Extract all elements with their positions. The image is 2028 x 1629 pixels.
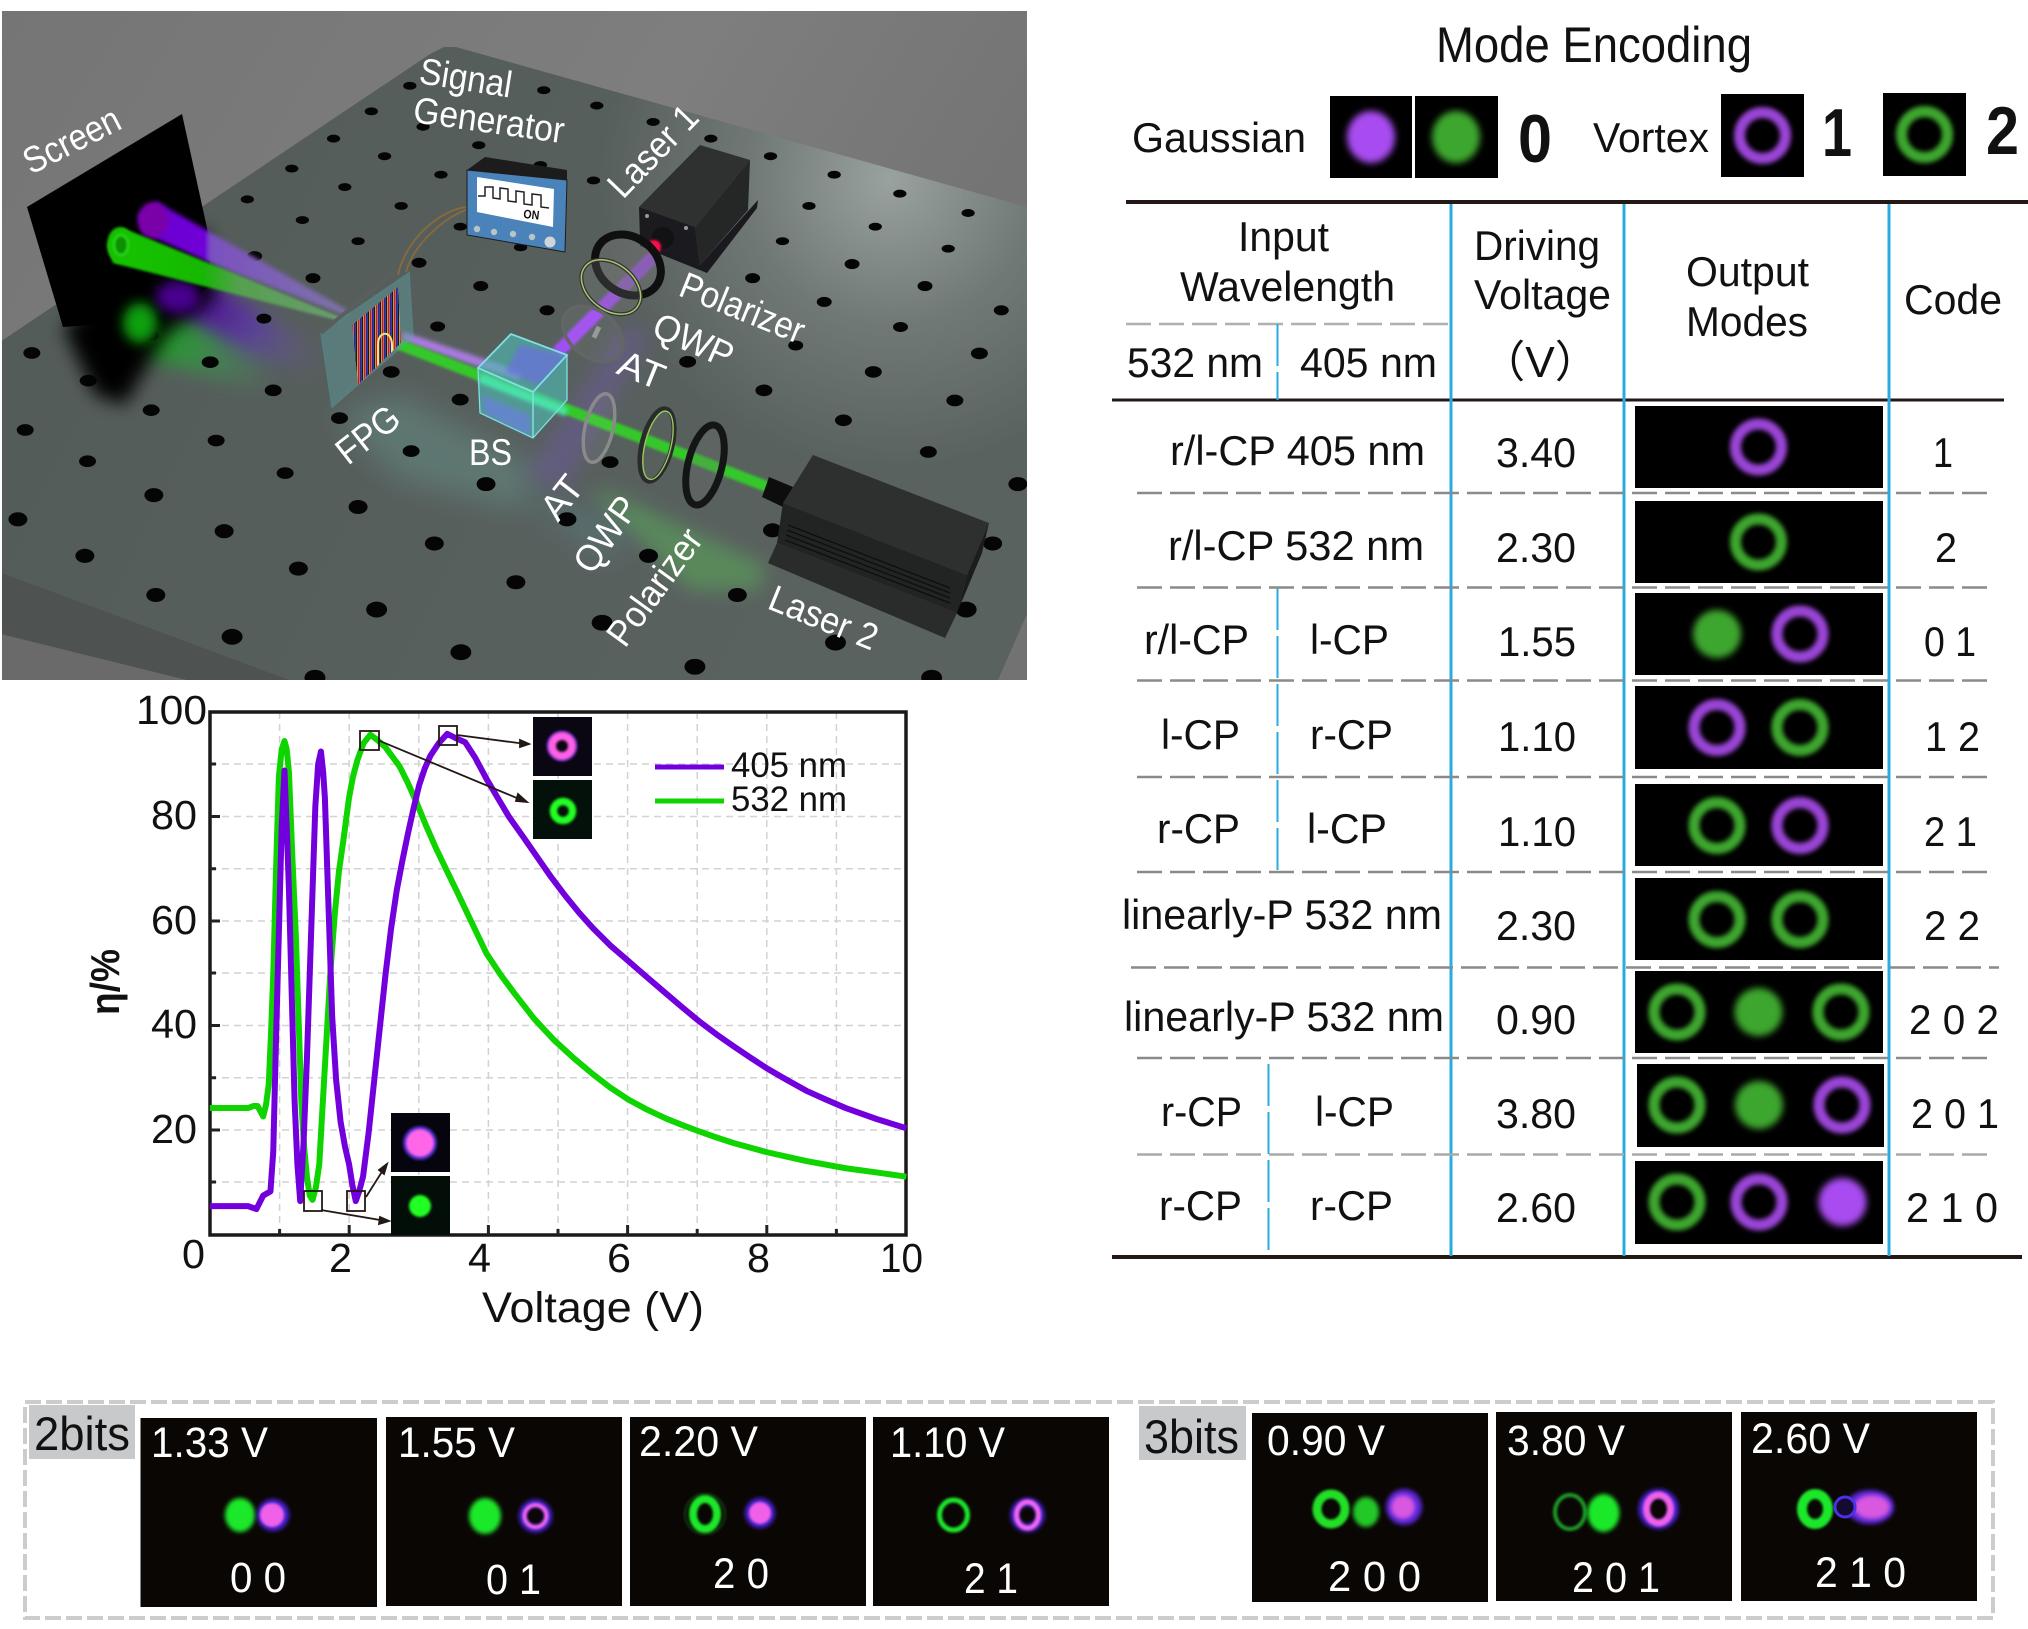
y axis labels: 80 — [151, 792, 197, 838]
result: 1.33 V, 0 0: 1.33 V — [151, 1419, 268, 1467]
result: 3.80 V, 2 0 1 — [1496, 1412, 1732, 1602]
table — [1112, 202, 2028, 1257]
result: 3.80 V, 2 0 1: 2 0 1 — [1572, 1554, 1660, 1602]
table light reflections — [125, 275, 765, 590]
grid lines — [210, 712, 906, 1234]
icon: laser 1 — [639, 145, 758, 273]
result: 2.20 V, 2 0: 2 0 — [713, 1550, 769, 1598]
result: 1.55 V, 0 1: 1.55 V — [398, 1419, 515, 1467]
icon: lower attenuator — [582, 392, 616, 464]
panel: mode encoding legend — [1132, 17, 2019, 178]
swatch: green gaussian — [1415, 96, 1498, 178]
result: 1.10 V, 2 1 — [873, 1417, 1109, 1606]
result: 1.10 V, 2 1: 2 1 — [964, 1555, 1018, 1603]
row: r-CP, l-CP, 3.80 V: 2 0 1 — [1911, 1090, 1999, 1137]
table header: Modes — [1686, 298, 1808, 345]
table header: Output — [1686, 248, 1809, 295]
swatch: purple vortex — [1721, 94, 1804, 177]
x axis labels: 6 — [607, 1235, 631, 1281]
result: 2.20 V, 2 0 — [630, 1417, 866, 1606]
y axis labels: 40 — [151, 1001, 197, 1047]
table header — [1126, 213, 2002, 387]
row: linearly-P 532 nm, 2.30 V: linearly-P 532 nm — [1122, 891, 1442, 938]
y axis labels: 100 — [136, 687, 207, 733]
tick marks — [210, 764, 836, 1235]
row: r/l-CP 532 nm: 2.30 — [1496, 524, 1576, 571]
axes frame — [210, 712, 906, 1235]
result: 1.55 V, 0 1 — [386, 1417, 622, 1606]
row: linearly-P 532 nm, 2.30 V: 2.30 — [1496, 902, 1576, 949]
badge: 3bits: 3bits — [1144, 1410, 1239, 1463]
panel: optical setup render — [0, 11, 1027, 686]
code 2: 2 — [1986, 93, 2019, 169]
row: r/l-CP, l-CP: 0 1 — [1924, 618, 1976, 665]
icon: FPG device — [321, 273, 413, 407]
result: 0.90 V, 2 0 0: 0.90 V — [1267, 1417, 1385, 1465]
main laser beams — [398, 253, 768, 487]
icon: upper polarizer — [591, 230, 665, 300]
code 1: 1 — [1822, 95, 1852, 171]
icon: upper attenuator — [561, 304, 625, 364]
x axis labels: 8 — [747, 1235, 770, 1281]
label: Laser 1: Laser 1 — [599, 97, 707, 206]
row: r/l-CP 532 nm — [1168, 501, 1957, 583]
row: r/l-CP, l-CP: r/l-CP — [1144, 616, 1249, 663]
screen reflections — [123, 281, 200, 343]
table rules — [1112, 202, 2028, 1257]
icon: lower polarizer — [682, 422, 728, 508]
icon: lower QWP — [637, 406, 677, 484]
title: Mode Encoding — [1436, 17, 1752, 73]
label: QWP upper: QWP — [647, 305, 740, 376]
row: r-CP, r-CP, 2.60 V: 2.60 — [1496, 1184, 1576, 1231]
row: r-CP, r-CP, 2.60 V — [1159, 1161, 1998, 1244]
swatch: green vortex — [1883, 93, 1966, 176]
table header: 532 nm — [1127, 339, 1263, 386]
swatch: purple gaussian — [1330, 96, 1412, 178]
row: r/l-CP 532 nm: r/l-CP 532 nm — [1168, 522, 1424, 569]
optical table — [0, 47, 1027, 680]
row: r-CP, l-CP: 1.10 — [1498, 808, 1576, 855]
table header: 405 nm — [1300, 339, 1437, 386]
y axis labels: 60 — [151, 897, 197, 943]
table header: Input — [1238, 213, 1329, 260]
table header: （V） — [1481, 338, 1599, 387]
row: linearly-P 532 nm, 0.90 V: 0.90 — [1496, 996, 1576, 1043]
row: r-CP, l-CP: 2 1 — [1924, 808, 1977, 855]
row: r-CP, l-CP — [1157, 784, 1977, 866]
row: linearly-P 532 nm, 2.30 V: 2 2 — [1924, 902, 1980, 949]
curve: 405 nm — [210, 734, 906, 1209]
result: 2.20 V, 2 0: 2.20 V — [639, 1418, 758, 1466]
icon: beam splitter cube — [478, 334, 567, 438]
icon: signal generator: ON — [523, 207, 540, 223]
row: r/l-CP 405 nm: 1 — [1933, 429, 1953, 476]
row: r-CP, r-CP, 2.60 V: r-CP — [1310, 1182, 1393, 1229]
row: r/l-CP 405 nm: r/l-CP 405 nm — [1170, 427, 1425, 474]
row: l-CP, r-CP: l-CP — [1161, 711, 1240, 758]
row: linearly-P 532 nm, 2.30 V — [1122, 878, 1980, 960]
result: 3.80 V, 2 0 1: 3.80 V — [1507, 1417, 1625, 1465]
x axis title: Voltage (V) — [482, 1284, 704, 1332]
dashed frame — [25, 1402, 1993, 1618]
result: 2.60 V, 2 1 0 — [1741, 1412, 1977, 1601]
row: r/l-CP, l-CP: l-CP — [1310, 616, 1389, 663]
row: r-CP, l-CP, 3.80 V — [1161, 1064, 1999, 1147]
chart: efficiency vs voltage — [82, 687, 923, 1332]
result: 2.60 V, 2 1 0: 2 1 0 — [1815, 1549, 1906, 1597]
row: r/l-CP 405 nm: 3.40 — [1496, 429, 1576, 476]
label: Polarizer upper: Polarizer — [674, 264, 811, 351]
inset: gaussian 405 nm — [391, 1113, 450, 1172]
x axis labels — [182, 1231, 923, 1281]
result: 1.33 V, 0 0 — [140, 1418, 377, 1607]
label: BS: BS — [469, 432, 512, 473]
y axis labels: 20 — [151, 1106, 197, 1152]
row: r/l-CP, l-CP — [1144, 593, 1976, 675]
icon: laser 2 — [762, 455, 989, 638]
label: Generator: Generator — [411, 89, 567, 151]
x axis labels: 4 — [468, 1235, 491, 1281]
table header: Wavelength — [1180, 263, 1395, 310]
label: AT upper: AT — [612, 342, 671, 398]
icon: upper QWP — [579, 258, 643, 316]
y axis labels — [136, 687, 207, 1152]
code 0: 0 — [1518, 101, 1552, 177]
legend: 405 nm — [731, 746, 847, 785]
row: r-CP, l-CP: l-CP — [1307, 805, 1387, 852]
row: r/l-CP 532 nm: 2 — [1935, 524, 1957, 571]
label: QWP lower: QWP — [565, 488, 647, 581]
row: r-CP, l-CP, 3.80 V: 3.80 — [1496, 1090, 1576, 1137]
y axis title: η/% — [82, 949, 128, 1015]
row: l-CP, r-CP — [1161, 686, 1980, 769]
row: r/l-CP 405 nm — [1170, 406, 1953, 488]
row: r/l-CP, l-CP: 1.55 — [1498, 618, 1576, 665]
label: Signal: Signal — [417, 50, 515, 105]
x axis labels: 2 — [329, 1235, 352, 1281]
panel: experimental results — [25, 1402, 1993, 1618]
result: 1.55 V, 0 1: 0 1 — [486, 1556, 541, 1604]
label: Laser 2: Laser 2 — [763, 577, 884, 658]
selection boxes and arrows — [304, 726, 529, 1224]
result: 2.60 V, 2 1 0: 2.60 V — [1751, 1415, 1870, 1463]
result: 1.10 V, 2 1: 1.10 V — [890, 1419, 1005, 1467]
x axis labels: 10 — [880, 1235, 923, 1281]
row: l-CP, r-CP: 1.10 — [1498, 713, 1576, 760]
label: Polarizer lower: Polarizer — [598, 520, 711, 654]
row: linearly-P 532 nm, 0.90 V: linearly-P 532 nm — [1124, 993, 1444, 1040]
badge: 2bits: 2bits — [34, 1407, 130, 1460]
row: r-CP, l-CP, 3.80 V: l-CP — [1315, 1088, 1394, 1135]
row: l-CP, r-CP: r-CP — [1310, 711, 1393, 758]
row: l-CP, r-CP: 1 2 — [1925, 713, 1980, 760]
legend — [655, 746, 847, 819]
result: 1.33 V, 0 0: 0 0 — [230, 1554, 286, 1602]
icon: screen — [27, 114, 212, 327]
row: r-CP, r-CP, 2.60 V: 2 1 0 — [1906, 1184, 1998, 1231]
table header: Driving — [1474, 222, 1600, 269]
row: linearly-P 532 nm, 0.90 V: 2 0 2 — [1909, 996, 1999, 1043]
screen shadow — [63, 228, 215, 405]
inset: vortex 405 nm — [533, 717, 592, 776]
label: Gaussian: Gaussian — [1132, 114, 1306, 161]
row: linearly-P 532 nm, 0.90 V — [1124, 971, 1999, 1053]
row dividers — [1131, 493, 1999, 1154]
laser beams to screen — [107, 202, 347, 321]
inset: gaussian 532 nm — [391, 1176, 450, 1235]
row: r-CP, l-CP: r-CP — [1157, 805, 1240, 852]
table header: Code — [1904, 276, 2002, 323]
label: FPG: FPG — [328, 397, 408, 472]
table mounting holes — [8, 82, 1027, 686]
label: AT lower: AT — [532, 467, 592, 528]
table header: Voltage — [1474, 271, 1611, 318]
x axis labels: 0 — [182, 1231, 205, 1277]
label: Vortex: Vortex — [1593, 114, 1709, 161]
wires — [398, 207, 466, 275]
setup labels — [16, 50, 884, 658]
result: 0.90 V, 2 0 0: 2 0 0 — [1328, 1553, 1421, 1601]
label: Screen: Screen — [16, 98, 127, 182]
inset: vortex 532 nm — [533, 780, 592, 839]
row: r-CP, r-CP, 2.60 V: r-CP — [1159, 1182, 1242, 1229]
row: r-CP, l-CP, 3.80 V: r-CP — [1161, 1088, 1242, 1135]
result: 0.90 V, 2 0 0 — [1252, 1413, 1488, 1602]
icon: signal generator — [467, 157, 567, 252]
curve: 532 nm — [210, 735, 906, 1200]
legend: 532 nm — [731, 780, 847, 819]
